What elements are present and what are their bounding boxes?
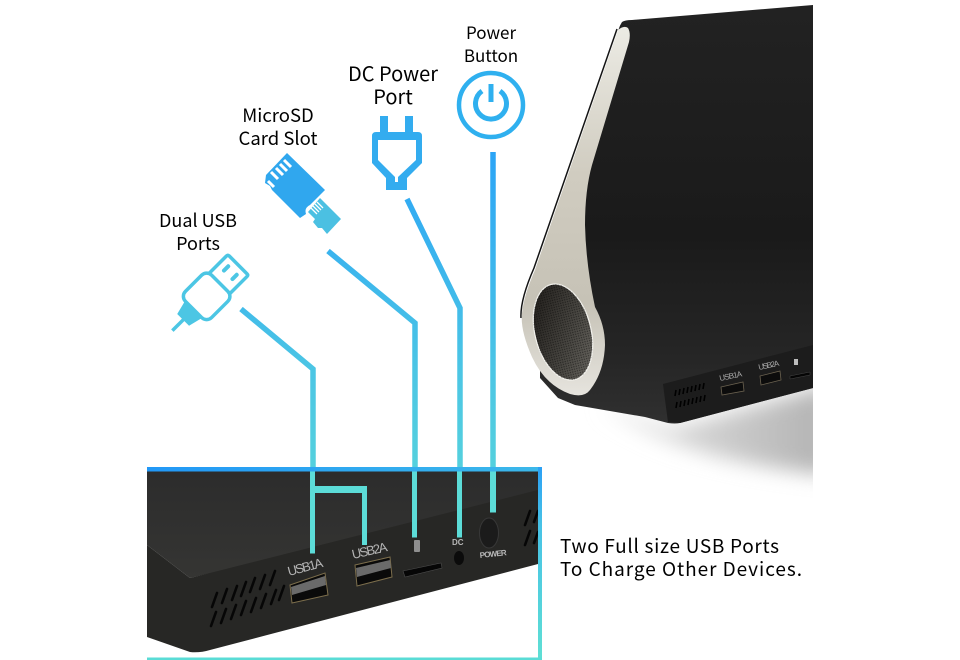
- USB1A port small: USB1A: [719, 369, 744, 383]
- device front face: [147, 490, 538, 652]
- chrome side strip: [522, 27, 630, 395]
- product photo: speaker dock: [521, 5, 830, 475]
- caption: Two Full size USB Ports: [560, 532, 779, 559]
- USB2A port small: [758, 359, 781, 385]
- label: Power Button: Button: [464, 42, 518, 67]
- speaker grille: [532, 283, 594, 380]
- label: Dual USB Ports: Dual USB: [159, 207, 237, 233]
- power button: [479, 518, 507, 560]
- micro card: [308, 198, 341, 234]
- label: MicroSD Card Slot: Card Slot: [239, 125, 317, 151]
- dark outer edge of the side strip: [521, 29, 617, 318]
- label: DC Power Port: DC Power: [348, 58, 438, 87]
- panel frame: [147, 467, 542, 660]
- port: microSD slot: [403, 540, 442, 577]
- icon: power button: [459, 73, 523, 137]
- power button: POWER: [479, 548, 507, 560]
- port: USB1A: [286, 555, 328, 603]
- port: USB2A: USB2A: [350, 539, 389, 562]
- icon: DC plug: [372, 116, 422, 190]
- port: USB2A: [350, 539, 392, 586]
- port: USB1A: USB1A: [286, 555, 325, 579]
- line: DC port: [407, 199, 460, 537]
- front panel: [663, 345, 813, 423]
- label: Dual USB Ports: Ports: [176, 230, 220, 256]
- port: DC jack: [452, 538, 464, 565]
- USB2A port small: USB2A: [758, 359, 781, 372]
- icon: microSD card: [265, 153, 341, 234]
- floor shadow: [628, 388, 813, 485]
- caption: To Charge Other Devices.: [560, 555, 802, 582]
- connector stubs over device: [310, 472, 496, 554]
- device top face: [147, 471, 538, 578]
- vents small: [675, 383, 705, 408]
- card contacts: [268, 160, 291, 187]
- vents: [211, 511, 538, 626]
- label: MicroSD Card Slot: MicroSD: [242, 102, 314, 128]
- line: USB ports: [241, 309, 365, 553]
- USB1A port small: [719, 369, 744, 395]
- icon: USB plug: [159, 252, 251, 344]
- line: MicroSD: [328, 251, 415, 537]
- line: power: [490, 152, 496, 512]
- port: DC jack: DC: [452, 538, 464, 547]
- speaker body: [540, 5, 813, 424]
- microSD slot small: [790, 359, 810, 379]
- connector lines: [241, 152, 493, 553]
- label: Power Button: Power: [466, 19, 516, 44]
- close-up panel of ports: [147, 471, 538, 652]
- label: DC Power Port: Port: [373, 81, 413, 110]
